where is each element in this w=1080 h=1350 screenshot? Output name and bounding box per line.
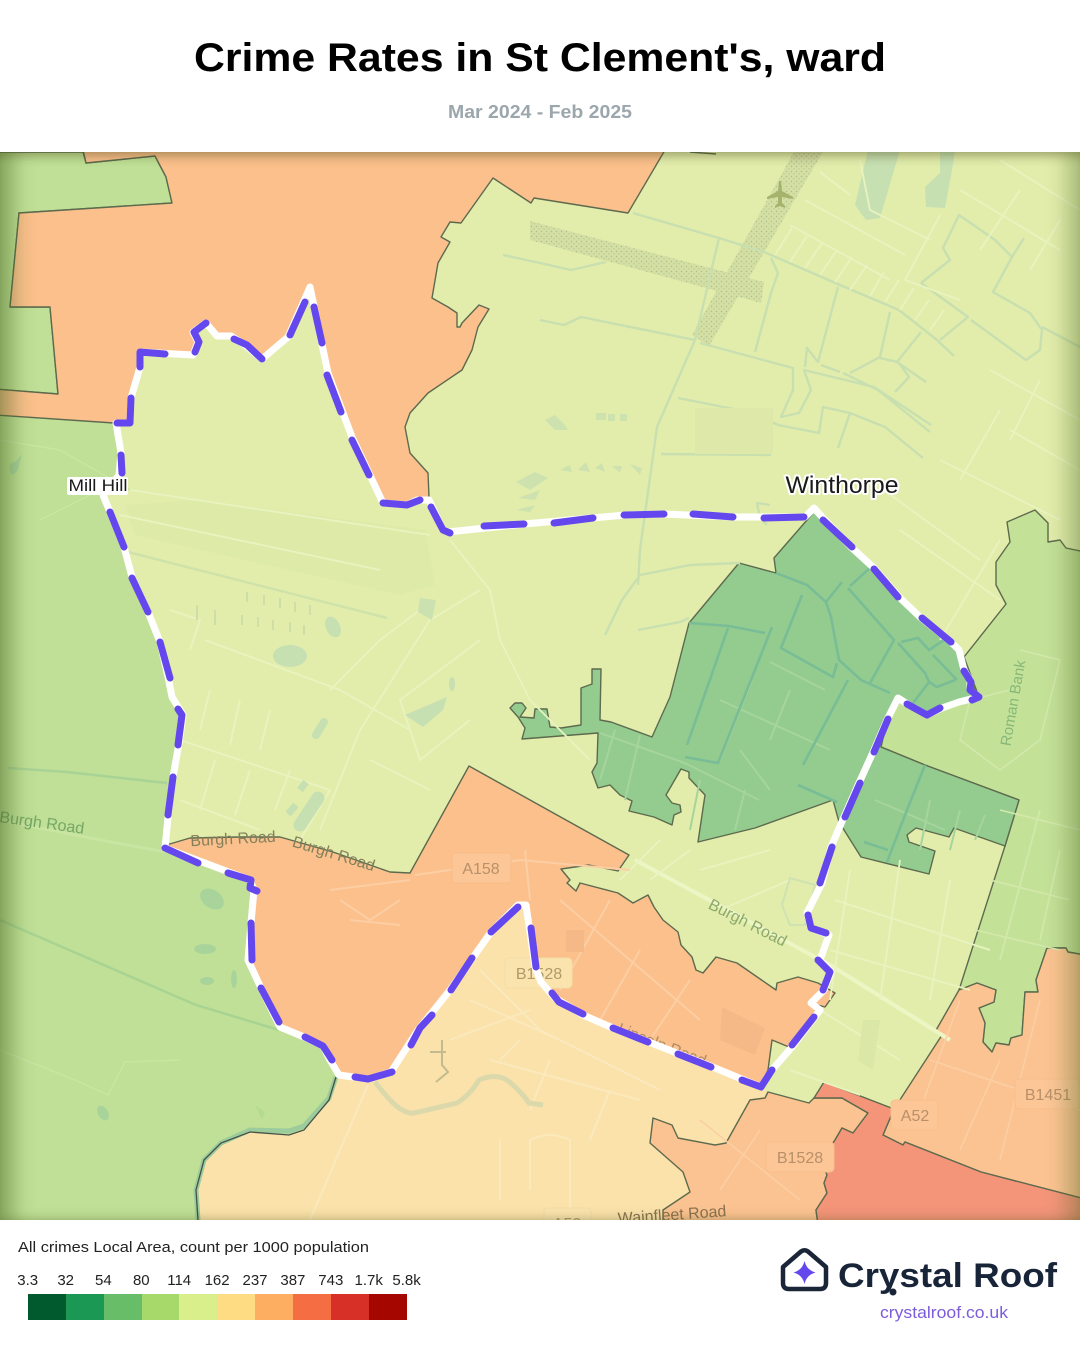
west green details bbox=[0, 440, 279, 1095]
shield: B1451: B1451 bbox=[1025, 1087, 1071, 1104]
streets north-east bbox=[775, 160, 1080, 640]
label: Wainfleet Road: Wainfleet Road bbox=[617, 1203, 727, 1228]
region: east green bbox=[881, 510, 1080, 1052]
streets and ponds inside ward west bbox=[120, 490, 590, 840]
legend scale labels: 80 bbox=[133, 1272, 150, 1289]
shield: A52 east: A52 bbox=[901, 1108, 929, 1125]
logo: Crystal Roof bbox=[783, 1250, 1058, 1322]
legend scale labels: 1.7k bbox=[355, 1272, 383, 1289]
legend scale labels: 3.3 bbox=[17, 1272, 38, 1289]
streets in yellow south bbox=[310, 970, 660, 1220]
streets south-east pale area bbox=[620, 840, 990, 1095]
legend scale labels: 743 bbox=[318, 1272, 343, 1289]
streets in orange central bbox=[330, 850, 700, 1040]
label: Burgh Road west: Burgh Road bbox=[0, 809, 85, 838]
shield: B1528 south: B1528 bbox=[777, 1150, 823, 1167]
drain across ward north bbox=[128, 552, 387, 618]
map base area bbox=[107, 152, 1080, 1107]
legend scale labels: 387 bbox=[280, 1272, 305, 1289]
drains north-east bbox=[503, 213, 1080, 635]
road shields bbox=[452, 853, 1080, 1238]
region: west green bbox=[0, 415, 336, 1220]
place label: Mill Hill: Mill Hill bbox=[68, 477, 128, 495]
shield: B1451 bbox=[1015, 1079, 1080, 1109]
label: Burgh Road centre 2: Burgh Road bbox=[290, 834, 377, 875]
legend title: All crimes Local Area, count per 1000 population bbox=[18, 1239, 369, 1256]
shield: B1528 west bbox=[517, 958, 572, 988]
legend scale labels: 32 bbox=[57, 1272, 74, 1289]
region: central orange bbox=[163, 766, 835, 1088]
shield: B1528 south bbox=[778, 1142, 834, 1172]
river south bbox=[196, 1076, 543, 1220]
east side streets in green and orange bbox=[960, 650, 1080, 960]
label: Burgh Road centre: Burgh Road bbox=[190, 829, 276, 850]
legend bbox=[17, 1239, 421, 1320]
icon: airport bbox=[767, 181, 793, 208]
legend scale labels: 114 bbox=[167, 1272, 191, 1289]
subtitle: date range: Mar 2024 - Feb 2025 bbox=[448, 101, 632, 122]
place label: Winthorpe: Winthorpe bbox=[786, 472, 898, 499]
icon: house with star bbox=[783, 1250, 826, 1289]
region: south yellow bbox=[196, 905, 768, 1225]
legend scale labels: 162 bbox=[205, 1272, 230, 1289]
title: Crime Rates in St Clement's, ward bbox=[194, 36, 886, 80]
lakes inside ward west bbox=[273, 598, 455, 825]
logo y keyhole bbox=[890, 1288, 896, 1296]
ward boundary purple dashes bbox=[110, 302, 979, 1087]
ward boundary white line bbox=[103, 287, 979, 1087]
runways bbox=[530, 150, 824, 346]
region: north-west green bbox=[0, 152, 172, 394]
top edge line bbox=[690, 152, 716, 154]
lakes north-east bbox=[855, 150, 955, 220]
label: Roman Bank: Roman Bank bbox=[998, 658, 1029, 747]
shield: A52 east bbox=[890, 1100, 928, 1121]
website url: crystalroof.co.uk bbox=[880, 1304, 1009, 1322]
streets in dark green area bbox=[600, 662, 985, 850]
region: south-east orange bbox=[883, 948, 1080, 1199]
shield: A158 bbox=[452, 853, 511, 883]
shield: A52 south bbox=[556, 1208, 580, 1220]
logo wordmark: Crystal Roof bbox=[838, 1257, 1058, 1295]
shield: A52 south: A52 bbox=[553, 1216, 581, 1233]
legend scale labels: 5.8k bbox=[392, 1272, 421, 1289]
ponds west bbox=[10, 454, 265, 1122]
region: dark green low-crime area bbox=[510, 512, 1019, 874]
icon: small structure south bbox=[430, 1040, 448, 1082]
label: Lincoln Road: Lincoln Road bbox=[615, 1021, 708, 1070]
shield: A158: A158 bbox=[462, 861, 500, 878]
legend scale labels: 54 bbox=[95, 1272, 112, 1289]
legend colour bar bbox=[28, 1294, 407, 1320]
ward boundary bbox=[103, 287, 979, 1087]
region: north orange bbox=[0, 150, 665, 505]
ponds and blocks north-central bbox=[516, 413, 642, 512]
road labels bbox=[0, 658, 1029, 1228]
label: Burgh Road east: Burgh Road bbox=[705, 896, 789, 950]
legend scale labels bbox=[17, 1272, 421, 1289]
region: red high-crime area bbox=[814, 1082, 1080, 1225]
region: south orange B1528 bbox=[650, 1092, 868, 1225]
shield: B1528 west: B1528 bbox=[516, 966, 562, 983]
legend scale labels: 237 bbox=[242, 1272, 268, 1289]
drains in dark green area bbox=[685, 568, 957, 862]
